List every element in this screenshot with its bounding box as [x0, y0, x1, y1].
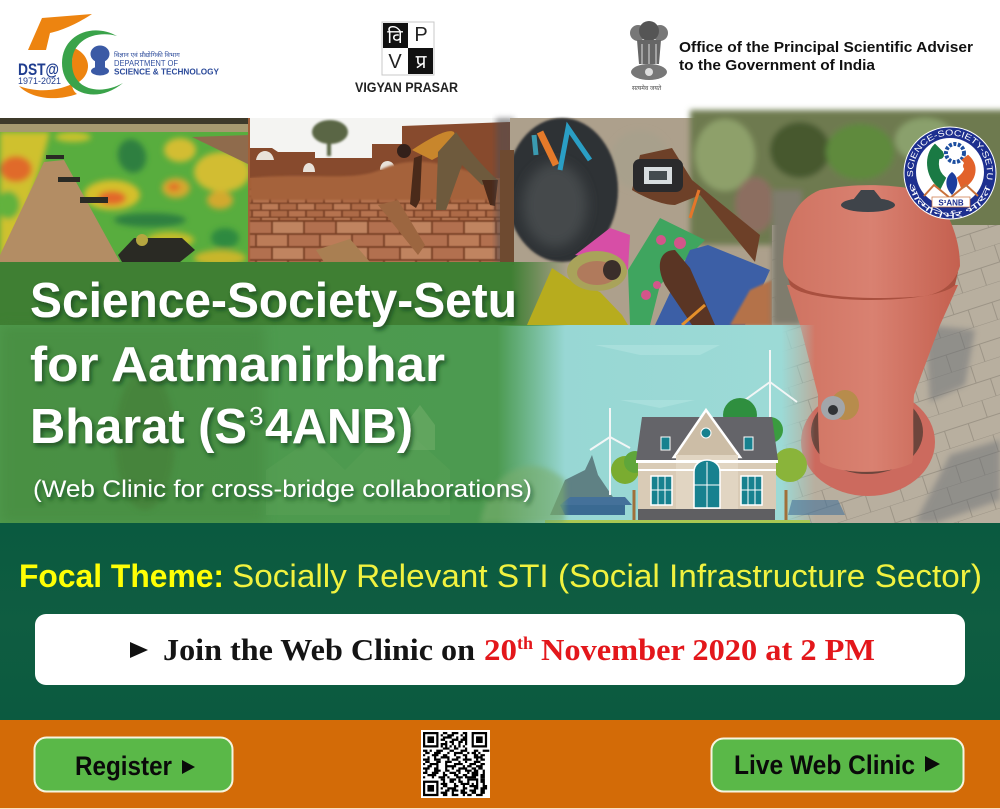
blue shirt — [655, 245, 770, 325]
photo: woman with handheld device — [500, 110, 1000, 328]
button: Live Web Clinic — [712, 738, 964, 792]
lower body — [787, 285, 958, 472]
illustration: sustainable house — [480, 325, 845, 523]
icon: national emblem blue — [90, 46, 110, 76]
subtitle: (Web Clinic for cross-bridge collaborations) — [33, 476, 532, 503]
button: Register — [34, 738, 232, 792]
logo: Vigyan Prasar: V — [388, 51, 402, 73]
date pill: th — [517, 633, 533, 653]
dish — [801, 388, 935, 496]
logo: Vigyan Prasar: P — [414, 24, 428, 46]
logo: DST 50 years: SCIENCE & TECHNOLOGY — [114, 66, 219, 76]
focal theme heading: Focal Theme: — [19, 558, 224, 594]
mud mould — [378, 200, 425, 255]
wind turbines — [590, 350, 797, 495]
logo: State Emblem and PSA office: Office of the Principal Scientific Adviser — [679, 39, 973, 56]
farm machines — [46, 155, 195, 262]
title panel: green overlay lower — [0, 325, 565, 523]
solar panels — [560, 497, 845, 515]
logo: State Emblem and PSA office: सत्यमेव जयते — [632, 84, 662, 92]
title text: for Aatmanirbhar — [30, 338, 445, 392]
house — [636, 410, 778, 520]
woman hair — [506, 118, 618, 262]
badge: S3ANB logo — [904, 126, 996, 220]
tree — [312, 120, 348, 156]
ground — [545, 520, 810, 523]
mud buildings — [250, 122, 510, 178]
trees — [611, 398, 807, 520]
worker — [397, 131, 498, 210]
title text: Science-Society-Setu — [30, 274, 517, 328]
mountains — [550, 455, 625, 515]
logo: DST 50 years — [18, 14, 219, 98]
top body — [783, 185, 960, 298]
title text — [30, 274, 517, 454]
logo: Vigyan Prasar: वि — [387, 25, 403, 48]
badge: S3ANB logo: S³ANB — [938, 198, 964, 208]
orange arm — [730, 280, 772, 325]
badge: S3ANB logo: SCIENCE-SOCIETY-SETU — [907, 130, 993, 180]
date pill — [35, 614, 965, 685]
focal theme heading: Socially Relevant STI (Social Infrastructure Sector) — [232, 558, 982, 594]
date pill: 20 — [484, 632, 517, 667]
header band — [0, 0, 1000, 118]
title text: 3 — [249, 401, 263, 431]
logo: DST 50 years: 1971-2021 — [18, 76, 61, 87]
logo: Vigyan Prasar: VIGYAN PRASAR — [355, 80, 458, 95]
pink cloth — [575, 228, 630, 270]
date pill: Join the Web Clinic on — [163, 632, 475, 667]
hair clip — [534, 128, 590, 170]
sari, green — [628, 218, 705, 325]
foliage background — [610, 110, 1000, 245]
title panel: green overlay upper — [0, 262, 568, 326]
date pill: November 2020 at 2 PM — [541, 632, 875, 667]
arm and hand with device — [632, 148, 760, 262]
logo: DST 50 years: DST@ — [18, 60, 59, 79]
button: Register: Register — [75, 751, 172, 781]
logo: Vigyan Prasar — [355, 22, 458, 95]
photo: clay water filter — [772, 185, 1000, 523]
badge: S3ANB logo: आत्मनिर्भर भारत — [910, 184, 990, 218]
focal theme band — [0, 523, 1000, 720]
logo: State Emblem and PSA office — [630, 21, 973, 92]
logo: DST 50 years: विज्ञान एवं प्रौद्योगिकी विभाग — [114, 51, 180, 59]
photo: brick making — [248, 118, 514, 263]
logo: DST 50 years: DEPARTMENT OF — [114, 58, 178, 68]
QR code — [421, 730, 490, 798]
logo: Vigyan Prasar: प्र — [416, 52, 428, 73]
title text: Bharat (S — [30, 400, 247, 454]
button: Live Web Clinic: Live Web Clinic — [734, 750, 915, 780]
footer bar — [0, 720, 1000, 809]
nozzle — [821, 390, 859, 420]
photo: precision farming heat map — [0, 118, 262, 266]
logo: State Emblem and PSA office: to the Government of India — [679, 57, 876, 74]
photo: yellow sari and baby — [527, 251, 628, 325]
title text: 4ANB) — [265, 400, 413, 454]
